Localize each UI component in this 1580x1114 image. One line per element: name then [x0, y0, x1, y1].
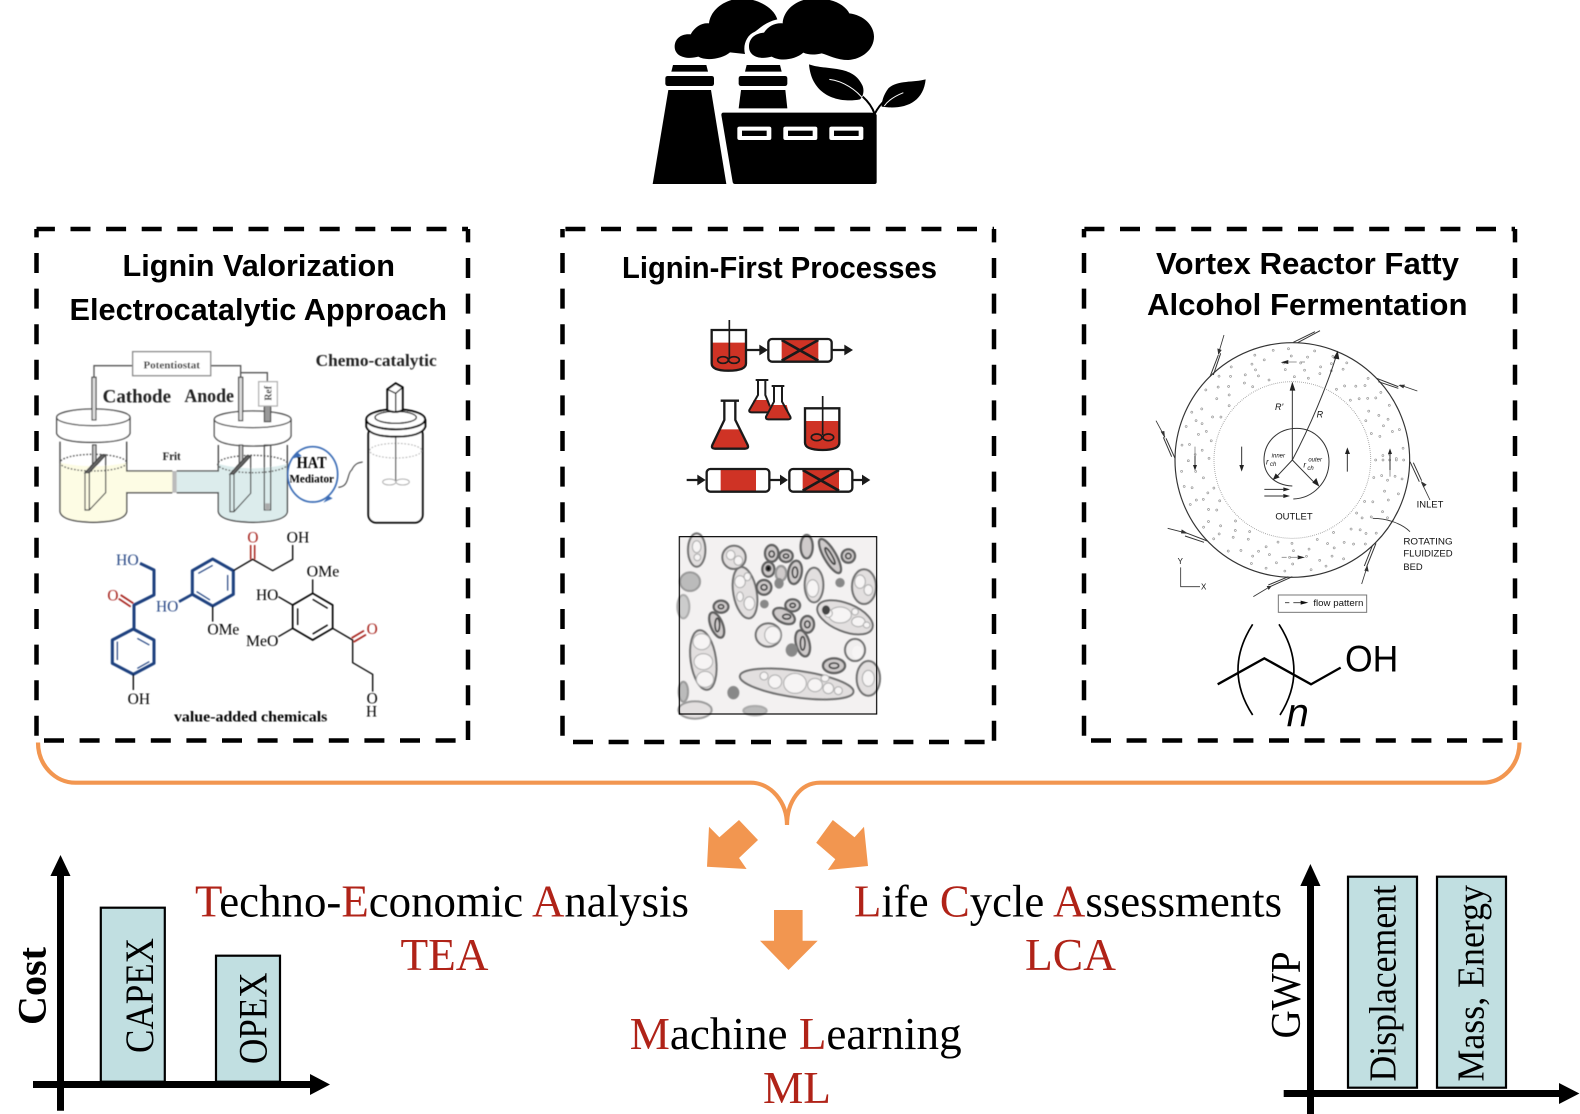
molecule: blue ring, methoxy ketone: HO: [156, 599, 178, 616]
HAT mediator cycle: [288, 447, 363, 503]
legend: flow pattern: flow pattern: [1313, 598, 1363, 608]
electrodes: [85, 377, 277, 512]
text: machine learning: Machine Learning: [630, 1008, 962, 1059]
heading: alcohol fermentation: Alcohol Fermentation: [1147, 287, 1468, 322]
arrow: orange toward LCA: [816, 820, 868, 870]
chart: cost bars CAPEX and OPEX: [10, 855, 330, 1111]
bar: displacement: Displacement: [1362, 885, 1404, 1082]
chart: GWP bars displacement and mass, energy: [1264, 864, 1579, 1114]
electrode labels: Frit: [163, 449, 181, 463]
molecule: syringyl ketone: O: [367, 621, 378, 638]
heading: lignin-first processes: Lignin-First Processes: [622, 250, 937, 285]
heading: electrocatalytic approach: Electrocatalytic Approach: [70, 292, 447, 327]
icons: small flasks: [749, 380, 791, 419]
reactor outer wall: [1175, 343, 1410, 577]
icon part: left smoke cloud: [675, 0, 777, 59]
electrode labels: Ref: [263, 385, 274, 401]
molecule: blue ring, methoxy ketone: [156, 529, 309, 638]
icon part: right smoke cloud: [749, 0, 874, 60]
icon: stirred tank top: [712, 320, 746, 371]
icon part: factory building with windows: [721, 113, 877, 184]
heading: lignin valorization: Lignin Valorization: [122, 248, 395, 283]
radius arrows: [1193, 351, 1392, 559]
reactor labels: ch: [1307, 466, 1314, 472]
reactor labels: BED: [1403, 562, 1423, 572]
bar: OPEX: [216, 956, 280, 1082]
central outlet chamber: [1264, 428, 1329, 499]
icon: bottom reactor train: [687, 469, 870, 492]
reactor labels: R: [1317, 409, 1324, 419]
panel border: dashed frame: [562, 229, 994, 742]
HAT mediator cycle: HAT: [297, 453, 327, 472]
arrow: orange toward TEA: [707, 820, 758, 869]
arrow and packed reactor top: [746, 339, 853, 362]
chemical structure: fatty alcohol: [1218, 624, 1398, 736]
molecule: syringyl ketone: MeO: [246, 633, 278, 650]
panel: lignin valorization electrocatalytic approach: [36, 229, 468, 740]
icon: factory with smoke clouds and leaves: [653, 0, 926, 184]
molecule: blue ring, methoxy ketone: OH: [287, 529, 309, 546]
panel border: dashed frame: [36, 229, 468, 740]
reactor labels: INLET: [1417, 500, 1444, 510]
brace: orange connector under panels: [38, 742, 1520, 825]
molecule: blue ring, methoxy ketone: OMe: [207, 621, 240, 638]
axes with arrowheads: [1284, 864, 1579, 1114]
reactor labels: R': [1275, 402, 1283, 412]
molecule: syringyl ketone: [246, 564, 378, 721]
icon: stirred tank middle: [805, 396, 839, 450]
electrode labels: [103, 351, 437, 463]
reactor labels: inner: [1272, 453, 1286, 459]
potentiostat and wires: Potentiostat: [143, 359, 200, 371]
tangential inlets: [1156, 331, 1430, 597]
reactor labels: r: [1266, 457, 1269, 466]
text: life cycle assessments: Life Cycle Assessments: [854, 876, 1282, 927]
reactor labels: OUTLET: [1275, 511, 1313, 521]
reactor labels: FLUIDIZED: [1403, 549, 1453, 559]
bed leader line and axes: [1181, 518, 1410, 587]
icon part: leaves: [809, 64, 926, 114]
molecule: blue ketone, para-hydroxy: HO: [116, 552, 139, 569]
molecule: blue ketone, para-hydroxy: O: [107, 588, 118, 605]
panel: vortex reactor fatty alcohol fermentation: [1084, 229, 1515, 740]
left jar outline: [57, 409, 172, 522]
molecule: syringyl ketone: OMe: [307, 564, 340, 581]
bar: CAPEX: [101, 908, 165, 1082]
icon part: right chimney: [739, 65, 787, 108]
axis label: cost: Cost: [10, 946, 54, 1025]
molecule: syringyl ketone: O: [367, 690, 378, 707]
electrolyte fills: [60, 463, 287, 522]
panel border: dashed frame: [1084, 229, 1515, 740]
molecule: syringyl ketone: H: [366, 704, 377, 721]
axes with arrowheads: [33, 855, 330, 1111]
electrode labels: Anode: [184, 386, 234, 407]
text: ML: ML: [763, 1062, 831, 1113]
diagram: bioreactor and flask icons: [677, 320, 880, 719]
image: micrograph of oleaginous cells: [677, 533, 880, 719]
fluidized bed particles: [1181, 349, 1404, 571]
axis label: GWP: GWP: [1264, 952, 1310, 1038]
potentiostat and wires: [94, 352, 267, 382]
bar: mass, energy: [1437, 877, 1506, 1088]
heading: vortex reactor fatty: Vortex Reactor Fatty: [1156, 246, 1460, 281]
electrode labels: Chemo-catalytic: [316, 351, 437, 370]
diagram: electrochemical cell and chemo-catalytic reactor: [57, 351, 437, 726]
reactor labels: outer: [1308, 457, 1323, 463]
reactor labels: ch: [1270, 462, 1277, 468]
legend: flow pattern: [1278, 595, 1367, 612]
reactor labels: r: [1303, 461, 1306, 470]
chemical structures: [107, 529, 378, 721]
bar: displacement: [1348, 877, 1417, 1088]
text: TEA: TEA: [400, 929, 488, 980]
reactor labels: Y: [1178, 557, 1184, 566]
electrode labels: Cathode: [103, 387, 171, 408]
chemical structure: fatty alcohol: n: [1287, 692, 1309, 736]
diagram: rotating fluidized bed vortex reactor: [1156, 331, 1453, 736]
molecule: blue ketone, para-hydroxy: OH: [128, 691, 150, 708]
HAT mediator cycle: Mediator: [289, 473, 334, 485]
bar: mass, energy: Mass, Energy: [1451, 885, 1493, 1082]
reactor labels: ROTATING: [1403, 537, 1453, 547]
chemical structure: fatty alcohol: OH: [1345, 638, 1398, 680]
chemo-catalytic reactor: [366, 383, 425, 523]
text: techno-economic analysis: Techno-Economic Analysis: [195, 876, 689, 927]
right jar outline: [177, 411, 291, 522]
molecule: syringyl ketone: HO: [256, 587, 278, 604]
icon part: left chimney: [653, 65, 726, 184]
panel: lignin-first processes: [562, 229, 994, 742]
icon: large flask: [712, 401, 748, 449]
text: LCA: LCA: [1025, 929, 1116, 980]
bar: CAPEX: CAPEX: [117, 938, 162, 1053]
reactor labels: X: [1201, 582, 1207, 591]
molecule: blue ring, methoxy ketone: O: [247, 529, 258, 546]
bar: OPEX: OPEX: [230, 972, 276, 1064]
arrow: orange toward ML: [760, 910, 818, 970]
reactor labels: [1178, 402, 1453, 591]
caption: value-added chemicals: value-added chemicals: [174, 710, 328, 726]
molecule: blue ketone, para-hydroxy: [107, 552, 154, 708]
inner dotted boundary: [1214, 382, 1371, 538]
